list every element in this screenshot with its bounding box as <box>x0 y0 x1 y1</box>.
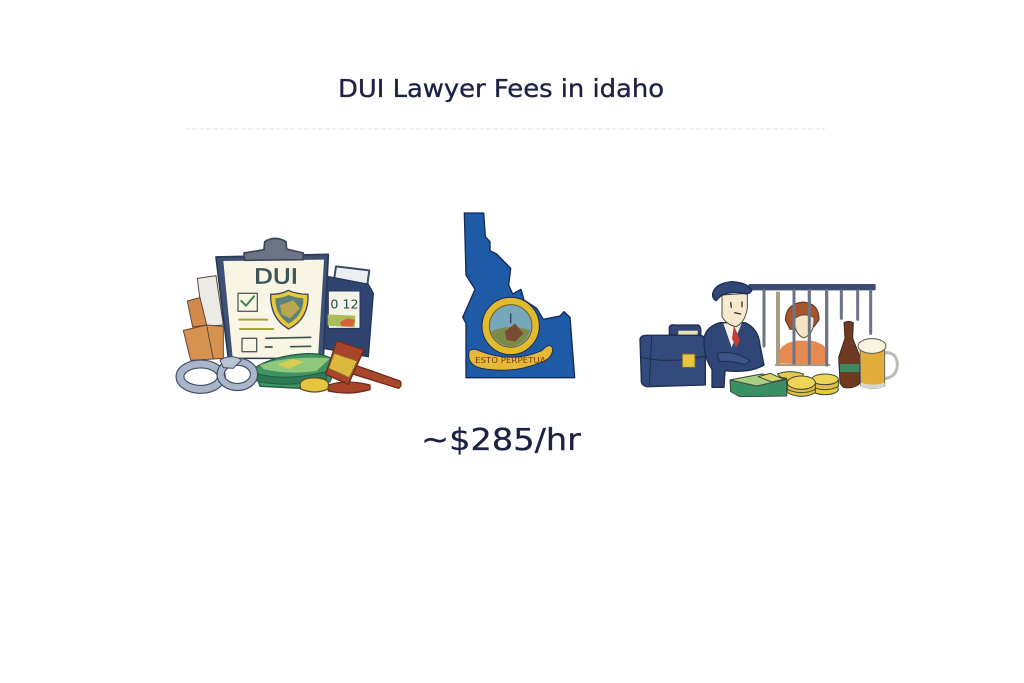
title: DUI Lawyer Fees in idaho <box>338 74 664 103</box>
gavel <box>345 363 401 388</box>
icon: lawyer, jailed person, cash and drinks <box>640 282 897 397</box>
prisoner <box>776 291 829 366</box>
breathalyzer: 0 12 <box>330 296 359 311</box>
cash and coins <box>730 372 838 397</box>
motto banner: ESTO PERPETUA <box>475 356 547 365</box>
lawyer <box>704 282 764 387</box>
icon: DUI paperwork, gavel and cash: DUI <box>254 265 298 289</box>
cash stack <box>254 354 337 388</box>
handcuffs <box>180 362 254 389</box>
briefcase <box>640 325 705 387</box>
icon: DUI paperwork, gavel and cash <box>180 238 401 393</box>
icon: Idaho state map with seal <box>463 213 575 378</box>
breathalyzer <box>320 266 373 357</box>
clipboard <box>216 254 328 358</box>
cell bars <box>748 284 876 363</box>
state seal <box>482 297 539 355</box>
coin <box>300 378 329 392</box>
motto banner <box>469 345 553 370</box>
hourly rate: ~$285/hr <box>421 423 582 458</box>
boxes behind clipboard <box>183 276 223 360</box>
beer mug <box>858 339 897 389</box>
beer bottle <box>839 321 860 388</box>
